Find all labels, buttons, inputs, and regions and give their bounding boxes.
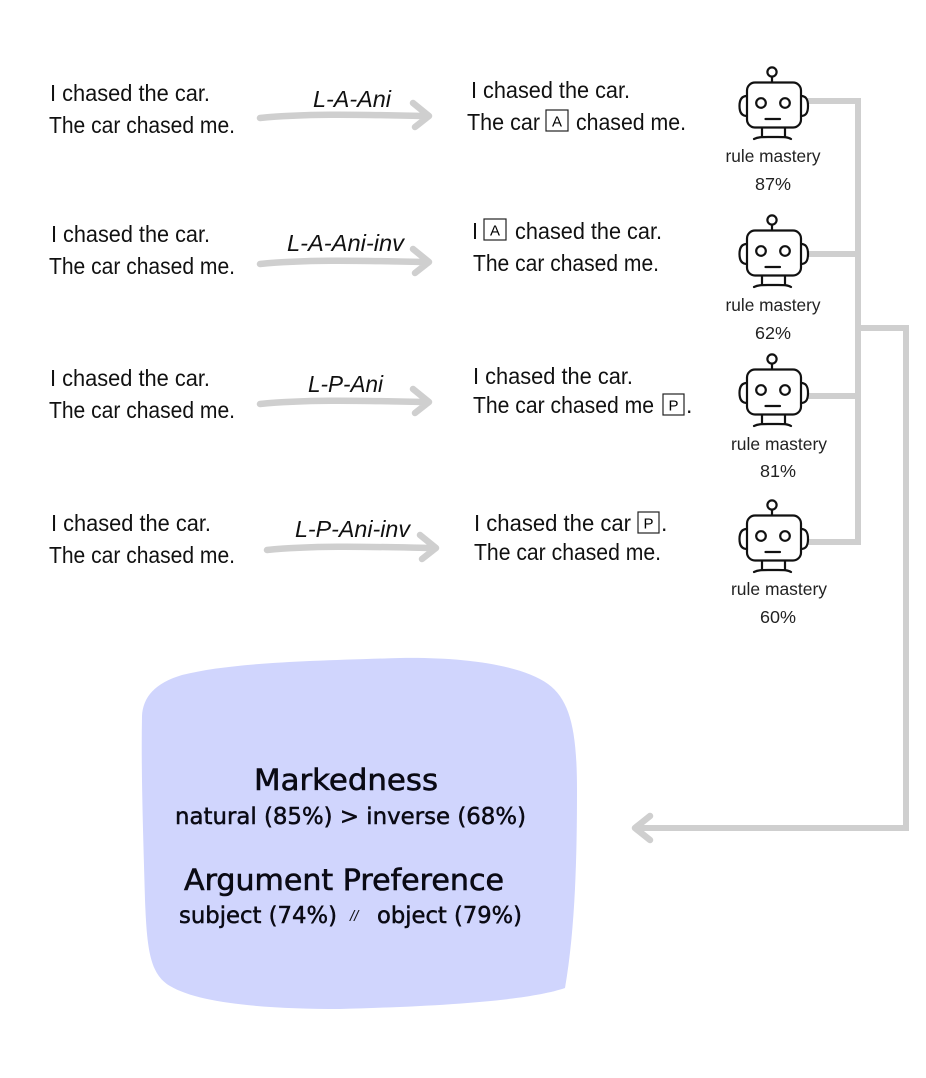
robot 3 mastery label	[731, 434, 827, 481]
row 2 source sentences: The car chased me.	[49, 253, 235, 279]
row 2 arrow: L-A-Ani-inv	[287, 230, 406, 256]
row 3 marked sentences: The car chased me	[473, 392, 654, 418]
row 4 marked sentences: .	[661, 510, 667, 536]
robot 2 mastery label	[726, 295, 821, 343]
robot 1 mastery label	[726, 146, 821, 194]
row 1 source sentences	[49, 80, 235, 138]
row 4 source sentences: The car chased me.	[49, 542, 235, 568]
row 2 marked sentences: I	[472, 218, 478, 244]
row 4 source sentences	[49, 510, 235, 568]
row 3 source sentences: I chased the car.	[50, 365, 210, 391]
row 1 arrow	[260, 86, 429, 127]
icon: robot 4	[740, 500, 808, 572]
row 4 marked sentences: P	[643, 516, 654, 532]
robot 2 mastery label: rule mastery	[726, 295, 821, 315]
heading: argument preference: Argument Preference	[184, 863, 504, 897]
icon: robot 3	[740, 354, 808, 426]
robot 4 mastery label: rule mastery	[731, 579, 827, 599]
arrow: to summary panel	[635, 816, 650, 840]
row 2 marked sentences: A	[490, 222, 500, 240]
row 4 marked sentences	[474, 510, 667, 565]
row 1 marked sentences: chased me.	[576, 109, 686, 135]
argument preference results: object (79%)	[377, 903, 522, 929]
robot 4 mastery label: 60%	[760, 607, 796, 627]
row 4 arrow	[267, 516, 436, 559]
row 3 source sentences: The car chased me.	[49, 397, 235, 423]
robot 3 mastery label: rule mastery	[731, 434, 827, 454]
robot 1 mastery label: rule mastery	[726, 146, 821, 166]
row 3 marked sentences: P	[668, 398, 679, 414]
row 2 marked sentences	[472, 218, 662, 276]
row 4 arrow: L-P-Ani-inv	[295, 516, 412, 542]
icon: robot 2	[740, 215, 808, 287]
row 3 arrow	[260, 371, 429, 413]
row 3 arrow: L-P-Ani	[308, 371, 384, 397]
row 2 marked sentences: chased the car.	[515, 218, 662, 244]
row 3 marked sentences	[473, 363, 692, 418]
row 4 marked sentences: I chased the car	[474, 510, 631, 536]
argument preference results: //	[349, 908, 360, 925]
connector lines from robots	[640, 101, 906, 828]
heading: markedness: Markedness	[254, 763, 438, 797]
markedness results: natural (85%) > inverse (68%)	[175, 804, 526, 830]
row 1 marked sentences: I chased the car.	[471, 77, 630, 103]
row 4 marked sentences: The car chased me.	[474, 539, 661, 565]
row 1 marked sentences: The car	[467, 109, 540, 135]
row 3 marked sentences: I chased the car.	[473, 363, 633, 389]
row 1 marked sentences	[467, 77, 686, 135]
row 4 source sentences: I chased the car.	[51, 510, 211, 536]
robot 3 mastery label: 81%	[760, 461, 796, 481]
row 2 source sentences: I chased the car.	[51, 221, 210, 247]
robot 1 mastery label: 87%	[755, 174, 791, 194]
row 3 marked sentences: .	[686, 392, 692, 418]
row 1 source sentences: I chased the car.	[50, 80, 210, 106]
row 2 marked sentences: The car chased me.	[473, 250, 659, 276]
argument preference results	[179, 903, 522, 929]
robot 4 mastery label	[731, 579, 827, 627]
row 2 source sentences	[49, 221, 235, 279]
argument preference results: subject (74%)	[179, 903, 337, 929]
row 2 arrow	[260, 230, 429, 273]
row 1 source sentences: The car chased me.	[49, 112, 235, 138]
panel: summary	[142, 658, 577, 1009]
row 1 arrow: L-A-Ani	[313, 86, 392, 112]
robot 2 mastery label: 62%	[755, 323, 791, 343]
icon: robot 1	[740, 67, 808, 139]
row 3 source sentences	[49, 365, 235, 423]
row 1 marked sentences: A	[552, 114, 562, 130]
